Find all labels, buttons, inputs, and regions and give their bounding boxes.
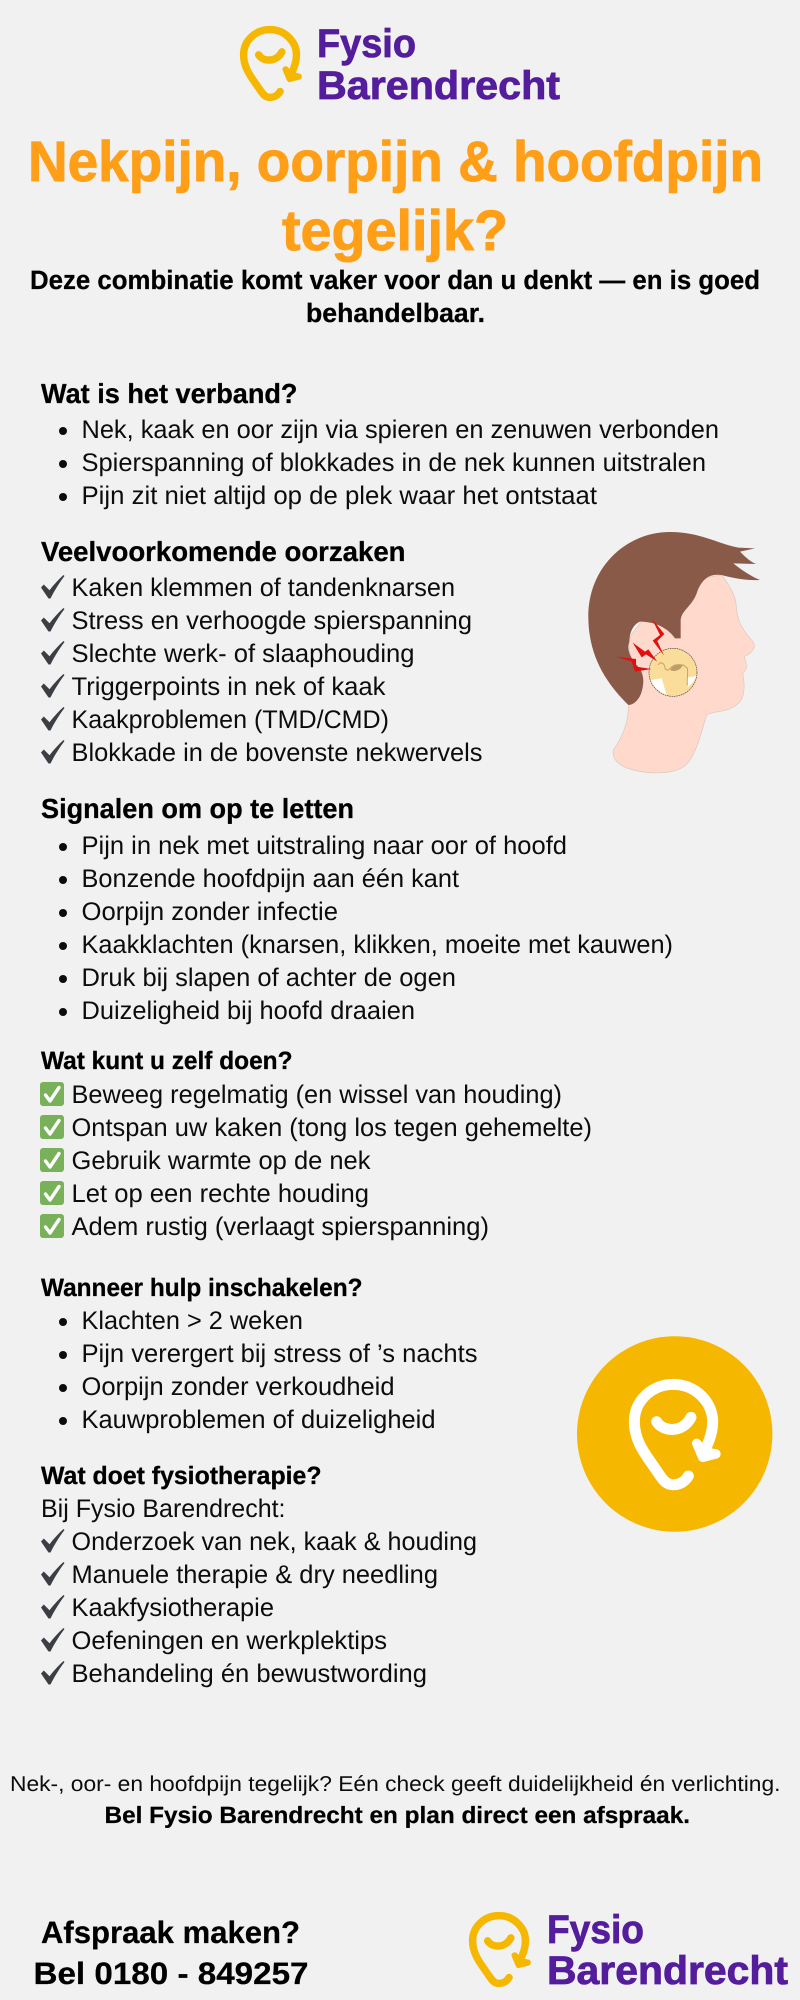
bullet list: Duizeligheid bij hoofd draaien	[82, 997, 415, 1025]
heading: Wat is het verband?	[41, 378, 298, 409]
check list: Triggerpoints in nek of kaak	[72, 673, 386, 701]
panel: signalen	[41, 793, 673, 1025]
green check list: Adem rustig (verlaagt spierspanning)	[72, 1213, 489, 1241]
check list: Manuele therapie & dry needling	[72, 1561, 438, 1589]
heading: Wat kunt u zelf doen?	[41, 1047, 292, 1075]
icon: ear logo	[244, 30, 299, 97]
icon: yellow circle with ear	[577, 1336, 772, 1532]
illustration: head with jaw pain	[588, 532, 760, 773]
panel: wat kunt u zelf doen	[40, 1047, 592, 1241]
bullet list: Pijn in nek met uitstraling naar oor of hoofd	[82, 832, 567, 860]
contact block: Afspraak maken?	[41, 1915, 300, 1950]
skin	[613, 575, 754, 773]
green check list: Let op een rechte houding	[72, 1180, 369, 1208]
panel: wanneer hulp inschakelen	[41, 1274, 478, 1434]
bullet list: Bonzende hoofdpijn aan één kant	[82, 865, 459, 893]
heading: Wanneer hulp inschakelen?	[41, 1274, 362, 1302]
logo: top	[244, 22, 560, 108]
logo text: Fysio	[317, 22, 416, 66]
check list: Kaakfysiotherapie	[72, 1594, 274, 1622]
logo text	[547, 1908, 788, 1993]
logo text	[317, 22, 560, 108]
bullet list	[59, 1307, 478, 1434]
panel: wat doet fysiotherapie	[41, 1462, 477, 1688]
title: Nekpijn, oorpijn & hoofdpijn	[28, 130, 763, 194]
bullet list: Oorpijn zonder infectie	[82, 898, 338, 926]
panel: wat is het verband	[41, 378, 719, 510]
subtitle: behandelbaar.	[306, 298, 485, 328]
check list: Blokkade in de bovenste nekwervels	[72, 739, 482, 767]
panel: veelvoorkomende oorzaken	[41, 536, 482, 767]
logo: bottom	[473, 1908, 788, 1993]
title	[28, 130, 763, 263]
bullet list: Pijn verergert bij stress of ’s nachts	[82, 1340, 478, 1368]
green check list: Ontspan uw kaken (tong los tegen gehemelte)	[72, 1114, 592, 1142]
contact block: Bel 0180 - 849257	[34, 1956, 308, 1991]
icon: ear logo	[473, 1916, 528, 1983]
jaw joint circle	[649, 648, 697, 696]
check list	[41, 574, 482, 767]
pain bolts	[616, 618, 664, 672]
intro line: Bij Fysio Barendrecht:	[41, 1495, 286, 1523]
call to action text: Bel Fysio Barendrecht en plan direct een afspraak.	[104, 1802, 690, 1828]
contact block	[34, 1915, 308, 1991]
heading: Signalen om op te letten	[41, 793, 354, 824]
bullet list: Pijn zit niet altijd op de plek waar het ontstaat	[82, 482, 597, 510]
bullet list: Kaakklachten (knarsen, klikken, moeite met kauwen)	[82, 931, 673, 959]
bullet list	[59, 416, 719, 510]
call to action text: Nek-, oor- en hoofdpijn tegelijk? Eén check geeft duidelijkheid én verlichting.	[10, 1772, 781, 1796]
subtitle: Deze combinatie komt vaker voor dan u denkt — en is goed	[30, 265, 760, 295]
bullet list: Nek, kaak en oor zijn via spieren en zenuwen verbonden	[82, 416, 719, 444]
title: tegelijk?	[282, 199, 508, 263]
bullet list: Klachten > 2 weken	[82, 1307, 303, 1335]
logo text: Barendrecht	[317, 64, 560, 108]
green check list: Beweeg regelmatig (en wissel van houding)	[72, 1081, 562, 1109]
subtitle	[30, 265, 760, 328]
bullet list: Oorpijn zonder verkoudheid	[82, 1373, 394, 1401]
heading: Veelvoorkomende oorzaken	[41, 536, 406, 567]
check list	[41, 1528, 477, 1688]
logo text: Barendrecht	[547, 1949, 788, 1993]
check list: Slechte werk- of slaaphouding	[72, 640, 414, 668]
bullet list: Kauwproblemen of duizeligheid	[82, 1406, 436, 1434]
bullet list	[59, 832, 673, 1025]
check list: Kaken klemmen of tandenknarsen	[72, 574, 455, 602]
heading: Wat doet fysiotherapie?	[41, 1462, 322, 1490]
call to action text	[10, 1772, 781, 1828]
check list: Stress en verhoogde spierspanning	[72, 607, 472, 635]
logo text: Fysio	[547, 1908, 644, 1952]
check list: Oefeningen en werkplektips	[72, 1627, 387, 1655]
green check list: Gebruik warmte op de nek	[72, 1147, 371, 1175]
bullet list: Druk bij slapen of achter de ogen	[82, 964, 456, 992]
check list: Kaakproblemen (TMD/CMD)	[72, 706, 389, 734]
check list: Onderzoek van nek, kaak & houding	[72, 1528, 477, 1556]
bullet list: Spierspanning of blokkades in de nek kunnen uitstralen	[82, 449, 706, 477]
check list: Behandeling én bewustwording	[72, 1660, 427, 1688]
green check list	[40, 1081, 592, 1241]
hair	[588, 532, 760, 705]
